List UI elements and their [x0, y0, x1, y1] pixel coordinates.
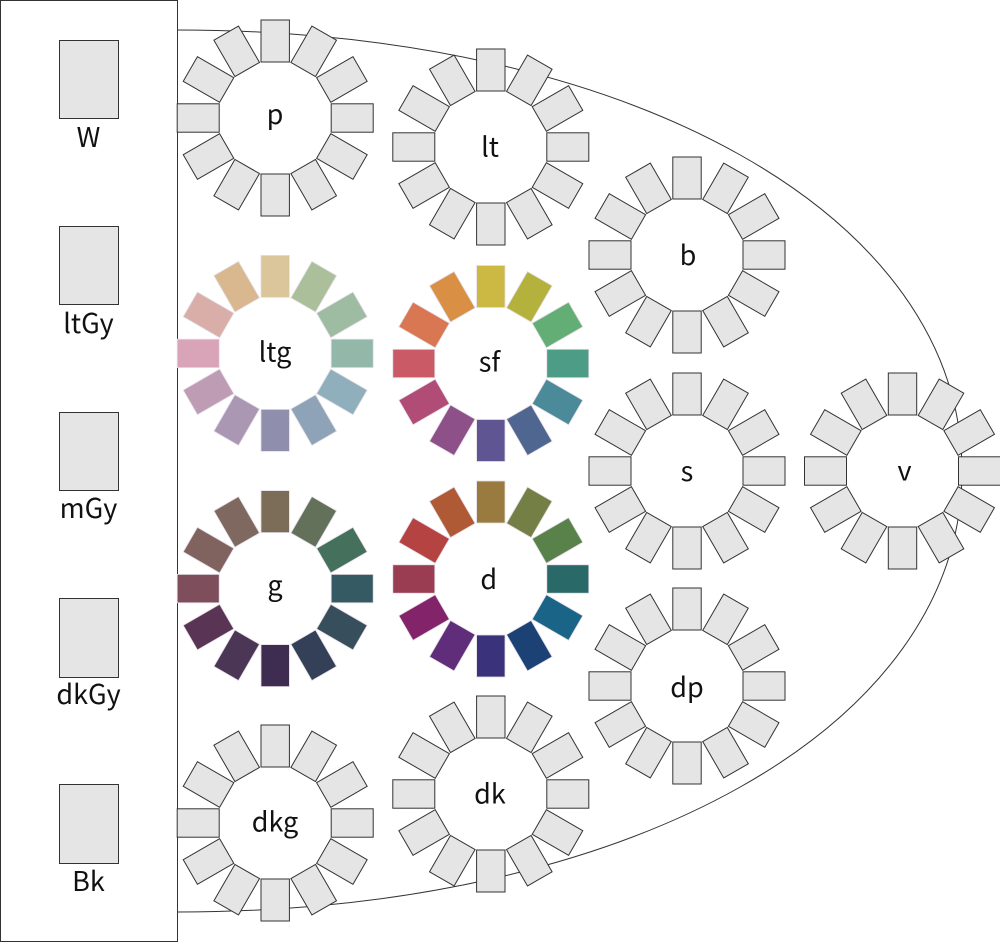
- label: dkGy: dkGy: [56, 673, 121, 712]
- label: ltGy: ltGy: [63, 302, 114, 341]
- tone ring: g colored: g: [267, 564, 283, 603]
- tone ring: s: [589, 373, 785, 569]
- swatch: mGy: [60, 412, 118, 490]
- tone ring: sf colored: sf: [479, 341, 501, 380]
- tone ring: ltg colored: [177, 255, 373, 451]
- tone ring: dkg: dkg: [252, 801, 298, 840]
- label: mGy: mGy: [60, 487, 117, 526]
- curved outline: vivid-tone boundary arc: [177, 30, 962, 912]
- tone ring: s: s: [681, 450, 693, 489]
- tone ring: v: v: [897, 450, 912, 489]
- tone ring: lt: lt: [481, 126, 499, 165]
- swatch: ltGy: [60, 226, 118, 304]
- tone ring: dp: [589, 588, 785, 784]
- label: W: W: [77, 116, 100, 155]
- tone ring: p: p: [267, 93, 283, 132]
- tone ring: dk: [393, 696, 589, 892]
- tone ring: b: b: [680, 234, 696, 273]
- tone ring: g colored: [177, 491, 373, 687]
- tone ring: sf colored: [393, 266, 589, 462]
- swatch: dkGy: [60, 598, 118, 678]
- panel: achromatic scale: [0, 0, 178, 942]
- tone ring: p: [177, 20, 373, 216]
- label: Bk: Bk: [72, 860, 105, 899]
- swatch: Bk: [60, 784, 118, 864]
- tone ring: ltg colored: ltg: [259, 330, 291, 370]
- tone ring: d colored: [393, 481, 589, 677]
- tone ring: lt: [393, 49, 589, 245]
- tone ring: dk: dk: [474, 772, 506, 812]
- tone ring: d colored: d: [480, 558, 497, 597]
- tone ring: dp: dp: [670, 666, 704, 705]
- swatch: W: [60, 40, 118, 118]
- tone ring: dkg: [177, 725, 373, 921]
- tone ring: v: [804, 373, 1000, 569]
- tone ring: b: [589, 157, 785, 353]
